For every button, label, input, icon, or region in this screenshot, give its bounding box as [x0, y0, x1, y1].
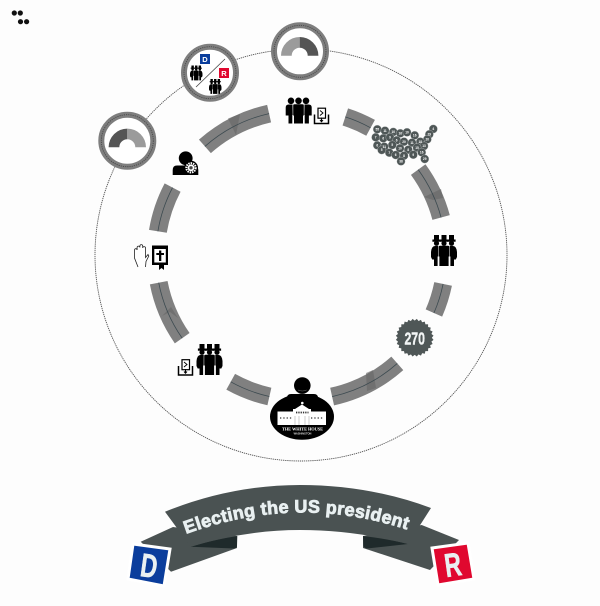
- left fold: [191, 536, 237, 548]
- banner title text: Electing the US president: [182, 500, 410, 534]
- icon: US map of state dots: 20: [402, 140, 406, 144]
- inner ring of arc segments: [158, 114, 443, 397]
- left tail: [141, 527, 237, 572]
- icon: US map of state dots: 8: [407, 148, 409, 152]
- icon: US map of state dots: 38: [399, 159, 403, 163]
- D square: D: [202, 55, 208, 64]
- icon: US map of state dots: 6: [376, 143, 378, 147]
- main band: [165, 485, 431, 547]
- arc: bottom left: [231, 382, 269, 396]
- icon: US map of state dots: 10: [405, 130, 409, 134]
- arc: left lower: [159, 283, 182, 338]
- icon: US map of state dots: 4: [432, 127, 434, 131]
- D party square: D: [138, 547, 160, 586]
- arc: left upper: [158, 188, 173, 231]
- delegates D: [190, 66, 202, 80]
- icon: US map of state dots: 16: [413, 133, 417, 137]
- icon: US map of state dots: 6: [396, 138, 398, 142]
- icon: US map of state dots: 5: [391, 143, 393, 147]
- right fold: [363, 536, 408, 548]
- icon: US map of state dots: 16: [420, 150, 424, 154]
- arc: bottom right: [332, 363, 397, 397]
- icon: US map of state dots: 7: [375, 135, 377, 139]
- menu dots icon: [12, 10, 29, 24]
- icon: US map of state dots: 11: [383, 145, 386, 149]
- icon: US map of state dots: 6: [395, 153, 397, 157]
- right tail: [363, 525, 459, 570]
- icon: US map of state dots: [372, 125, 437, 166]
- badge: 270 electoral votes: 270: [404, 328, 425, 348]
- diagonal divider: [196, 59, 225, 87]
- badge: top semicircle chart: [274, 25, 326, 77]
- arc: right lower: [434, 284, 443, 313]
- icon: US map of state dots: 29: [423, 157, 427, 161]
- icon: US map of state dots: 11: [410, 141, 414, 145]
- badge: left semicircle chart: [101, 115, 153, 167]
- arc: right upper: [418, 170, 443, 218]
- arc: registration to primaries: [205, 114, 269, 146]
- icon: oath hand and Bible: [134, 245, 168, 270]
- White House seal: THE WHITE HOUSE: [282, 426, 323, 432]
- icon: US map of state dots: 9: [389, 135, 391, 139]
- title banner: [130, 485, 472, 586]
- icon: US map of state dots: 16: [399, 131, 402, 135]
- R party square: R: [442, 546, 464, 585]
- icon: electors and ballot box: [178, 344, 222, 375]
- icon: US map of state dots: 13: [422, 144, 426, 148]
- icon: US map of state dots: 15: [415, 146, 419, 150]
- icon: US map of state dots: 29: [428, 132, 431, 136]
- icon: US map of state dots: 10: [392, 130, 395, 134]
- icon: US map of state dots: 20: [426, 137, 429, 141]
- icon: US map of state dots: 5: [381, 148, 383, 152]
- icon: president at the White House: [270, 377, 334, 440]
- president head: [294, 377, 311, 394]
- icon: electors: [431, 235, 457, 266]
- raised hand: [134, 245, 149, 267]
- icon: voters and ballot box: [286, 98, 328, 124]
- Bible: [152, 246, 168, 270]
- R party square: [432, 543, 474, 585]
- icon: US map of state dots: 10: [398, 146, 402, 150]
- badge: 270 electoral votes: [396, 319, 434, 357]
- outer dotted circle: [95, 49, 507, 461]
- president shoulders: [287, 394, 318, 404]
- delegates R: [209, 79, 221, 94]
- icon: US map of state dots: 9: [412, 153, 414, 157]
- White House seal: [270, 394, 334, 440]
- D party square: [128, 544, 170, 586]
- icon: US map of state dots: 7: [388, 151, 390, 155]
- icon: US map of state dots: 11: [383, 129, 387, 133]
- White House seal: WASHINGTON: [294, 432, 312, 436]
- arc: top right: [345, 117, 371, 128]
- icon: candidate with gear: [173, 151, 198, 175]
- icon: US map of state dots: 18: [419, 140, 422, 144]
- R square: R: [221, 69, 227, 78]
- icon: US map of state dots: 55: [376, 127, 379, 131]
- badge: party delegates D and R: [184, 47, 236, 99]
- icon: US map of state dots: 8: [403, 154, 405, 158]
- icon: US map of state dots: 6: [382, 136, 384, 140]
